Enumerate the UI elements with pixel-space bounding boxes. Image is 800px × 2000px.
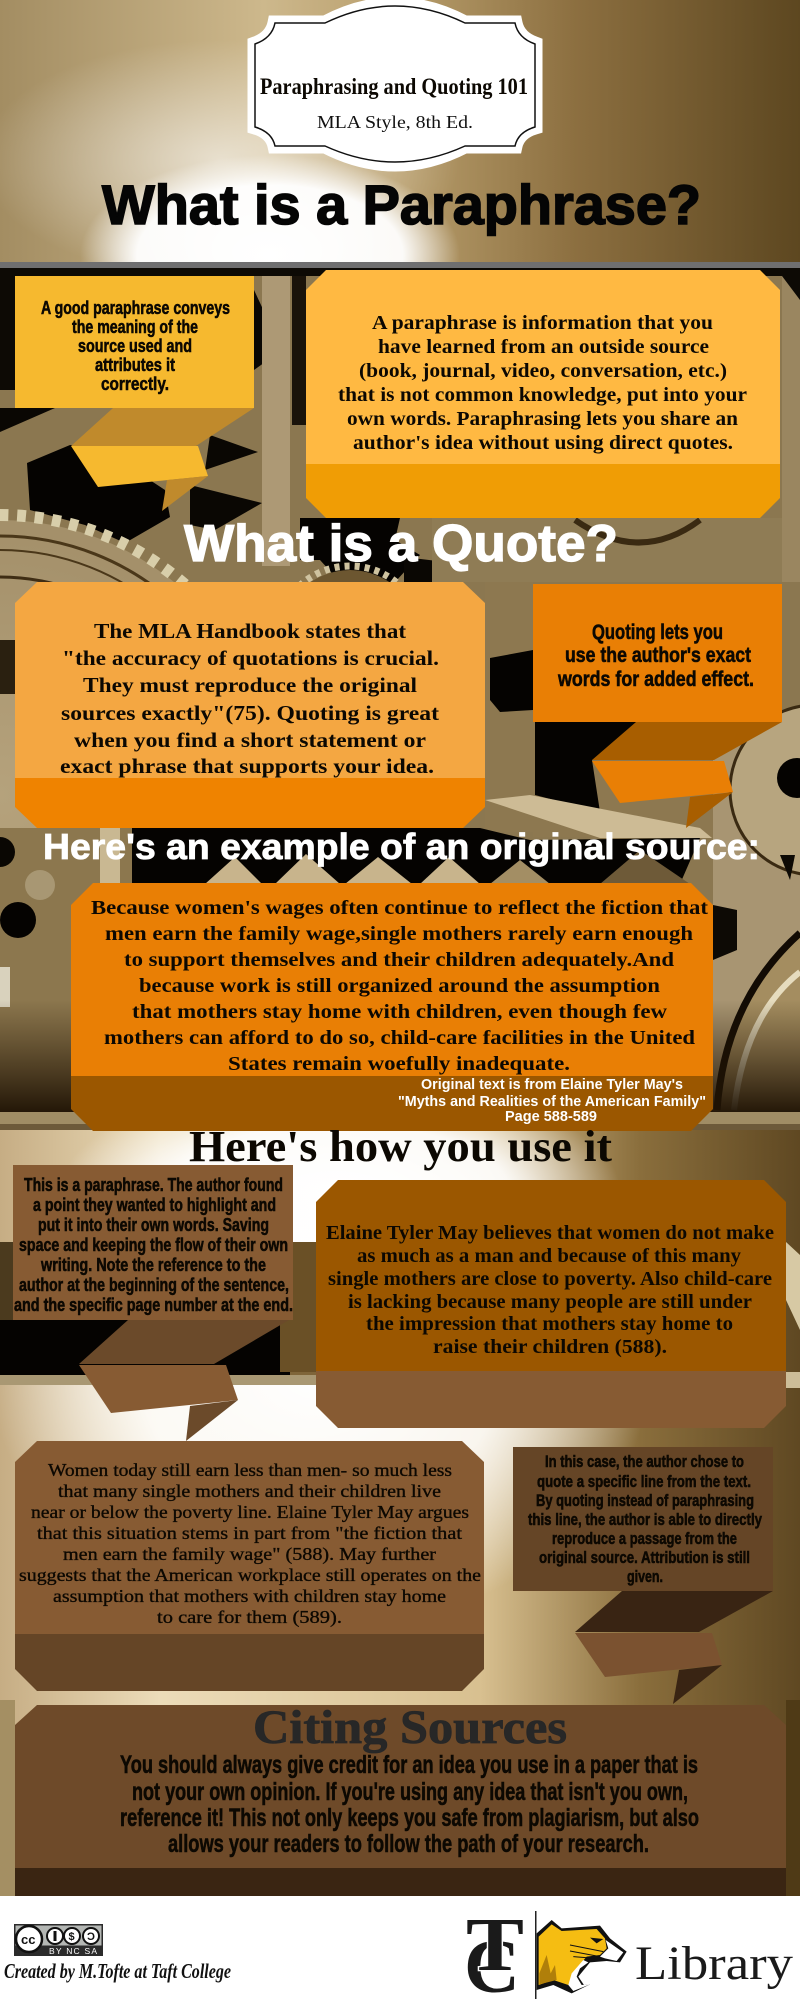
paragraph: have learned from an outside source (378, 336, 709, 358)
callout text: space and keeping the flow of their own (19, 1235, 288, 1255)
paragraph: assumption that mothers with children stay home (53, 1586, 446, 1606)
citing heading: Citing Sources (253, 1701, 567, 1754)
panel: paraphrase definition (306, 270, 780, 518)
callout text: correctly. (101, 374, 169, 394)
callout text: given. (627, 1568, 663, 1586)
plaque title: Paraphrasing and Quoting 101 (260, 74, 528, 99)
logo word: Library (635, 1937, 793, 1990)
title plaque (255, 4, 535, 164)
paragraph: when you find a short statement or (74, 728, 426, 752)
paragraph: near or below the poverty line. Elaine Tyler May argues (31, 1502, 469, 1522)
big gear left (0, 520, 275, 1070)
paragraph: suggests that the American workplace still operates on the (19, 1565, 481, 1585)
right gear (713, 722, 800, 1122)
paragraph: the impression that mothers stay home to (366, 1313, 733, 1335)
icon: creative commons badge (14, 1924, 103, 1956)
footer white strip (0, 1896, 800, 2000)
panel: MLA handbook quote (15, 582, 485, 828)
heading: example of original source: Here's an example of an original source: (43, 826, 760, 867)
paragraph: A paraphrase is information that you (372, 312, 713, 334)
heading: what is a quote: What is a Quote? (184, 515, 618, 573)
paragraph: that this situation stems in part from "the fiction that (37, 1523, 462, 1543)
paragraph: sources exactly"(75). Quoting is great (61, 701, 439, 725)
credit line: Created by M.Tofte at Taft College (4, 1959, 231, 1983)
source passage: Because women's wages often continue to reflect the fiction that (91, 897, 708, 919)
paragraph: Elaine Tyler May believes that women do not make (326, 1222, 774, 1244)
icon: creative commons badge: $ (68, 1931, 75, 1943)
callout: quoting (533, 584, 782, 828)
callout text: A good paraphrase conveys (41, 298, 230, 318)
citing body (120, 1751, 699, 1858)
panel: quote example (15, 1441, 484, 1691)
callout: good paraphrase (15, 276, 254, 511)
logo divider (535, 1911, 536, 1999)
icon: creative commons badge: Ɔ (87, 1931, 95, 1943)
panel: citing sources (15, 1701, 786, 1896)
paragraph: raise their children (588). (433, 1336, 667, 1358)
icon: tiger head (537, 1920, 627, 1993)
source passage: to support themselves and their children adequately.And (124, 949, 675, 971)
paragraph: author's idea without using direct quotes. (353, 432, 733, 454)
callout text: In this case, the author chose to (545, 1453, 744, 1471)
paragraph (19, 1460, 481, 1628)
paragraph: own words. Paraphrasing lets you share an (347, 408, 739, 430)
paragraph: Women today still earn less than men- so much less (48, 1460, 452, 1480)
callout text (557, 621, 754, 691)
callout text: reproduce a passage from the (552, 1530, 737, 1548)
callout text: quote a specific line from the text. (537, 1473, 751, 1491)
icon: creative commons badge: BY NC SA (49, 1946, 97, 1956)
callout: this is a paraphrase (13, 1165, 293, 1441)
background: lower gold gradient (0, 1130, 800, 1900)
callout text: Quoting lets you (592, 621, 723, 644)
heading: how you use it: Here's how you use it (189, 1122, 612, 1171)
attribution: Page 588-589 (505, 1109, 597, 1125)
callout: in this case (513, 1447, 773, 1704)
callout text: words for added effect. (557, 668, 754, 691)
attribution: "Myths and Realities of the American Family" (398, 1094, 706, 1110)
paragraph: The MLA Handbook states that (94, 619, 406, 643)
logo: TC Library (464, 1903, 793, 2000)
paragraph: men earn the family wage" (588). May further (63, 1544, 436, 1565)
source passage: mothers can afford to do so, child-care facilities in the United (104, 1027, 696, 1049)
source passage: men earn the family wage,single mothers rarely earn enough (105, 923, 694, 945)
source passage: because work is still organized around the assumption (139, 975, 661, 997)
callout text: and the specific page number at the end. (14, 1295, 293, 1315)
paragraph: that is not common knowledge, put into your (338, 384, 747, 406)
callout text: use the author's exact (565, 644, 751, 667)
callout text: the meaning of the (72, 317, 198, 337)
right tan region (432, 518, 800, 582)
background: gears photograph section (0, 262, 800, 1130)
callout text: original source. Attribution is still (539, 1549, 750, 1567)
callout text: writing. Note the reference to the (40, 1255, 266, 1275)
paragraph: (book, journal, video, conversation, etc.) (359, 360, 727, 382)
attribution: Original text is from Elaine Tyler May's (421, 1077, 683, 1093)
heading: what is a paraphrase: What is a Paraphrase? (102, 173, 701, 236)
paragraph: to care for them (589). (157, 1607, 342, 1628)
callout text: put it into their own words. Saving (38, 1215, 269, 1235)
source passage (91, 897, 708, 1075)
icon: creative commons badge: cc (21, 1932, 35, 1947)
plaque subtitle: MLA Style, 8th Ed. (317, 112, 473, 132)
background: upper gold gradient (0, 0, 800, 264)
callout text: author at the beginning of the sentence, (19, 1275, 289, 1295)
paragraph (326, 1222, 774, 1358)
callout text (14, 1175, 293, 1315)
callout text: This is a paraphrase. The author found (24, 1175, 283, 1195)
paragraph: as much as a man and because of this many (357, 1245, 741, 1267)
attribution (398, 1077, 706, 1125)
paragraph (60, 619, 439, 778)
panel: paraphrase example (316, 1180, 786, 1428)
paragraph: that many single mothers and their children live (58, 1481, 441, 1501)
paragraph: exact phrase that supports your idea. (60, 754, 434, 778)
source passage: that mothers stay home with children, even though few (132, 1001, 667, 1023)
between boxes dark teeth (485, 582, 533, 832)
callout text (528, 1453, 763, 1586)
dark band with teeth (130, 828, 700, 884)
paragraph: single mothers are close to poverty. Also child-care (328, 1268, 772, 1290)
callout text: source used and (78, 336, 192, 356)
source passage: States remain woefully inadequate. (228, 1053, 570, 1075)
middle gear teeth (280, 570, 420, 710)
paragraph (338, 312, 747, 454)
paragraph: They must reproduce the original (83, 673, 417, 697)
paragraph: is lacking because many people are still under (348, 1291, 752, 1313)
logo letters: T (466, 1903, 524, 1987)
panel: original source (71, 883, 713, 1131)
callout text (41, 298, 230, 394)
callout text: a point they wanted to highlight and (33, 1195, 276, 1215)
callout text: attributes it (95, 355, 175, 375)
paragraph: "the accuracy of quotations is crucial. (62, 646, 439, 670)
